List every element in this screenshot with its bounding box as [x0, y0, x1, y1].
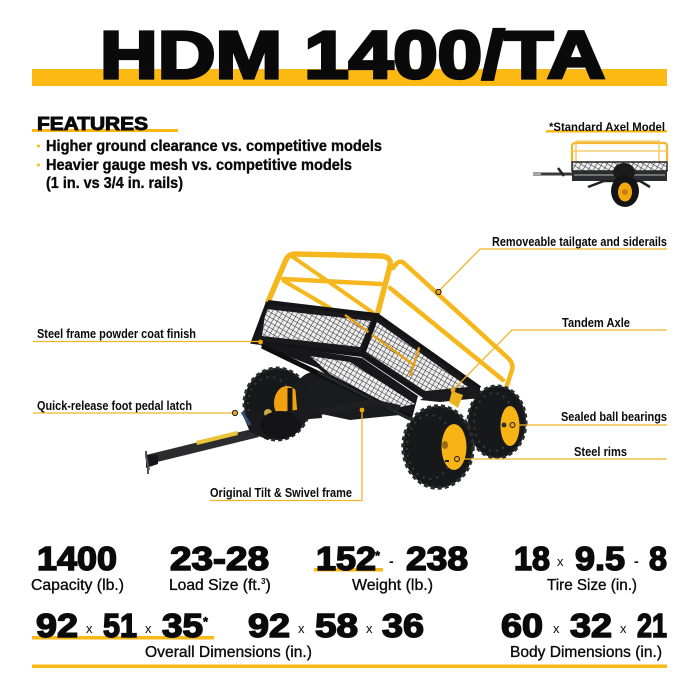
- bottom rule: [32, 664, 667, 668]
- callout: removeable tailgate and siderails: [436, 235, 667, 295]
- callout: steel rims: [454, 445, 667, 462]
- stat: body dimensions: Body Dimensions (in.): [510, 644, 662, 661]
- stat: weight: 238: [406, 540, 468, 577]
- frame and undercarriage: [255, 342, 418, 420]
- features list: [37, 138, 382, 192]
- title: [32, 18, 667, 93]
- stat: tire size: [514, 540, 667, 594]
- callout: sealed ball bearings: Sealed ball bearings: [561, 410, 667, 424]
- cart photo: tandem axle tilt trailer: [146, 254, 526, 488]
- stat: tire size: 18: [514, 540, 550, 577]
- front tandem wheel: [403, 388, 480, 488]
- stat: tire size: -: [634, 553, 639, 569]
- stat: overall dimensions tandem axle: x: [366, 621, 373, 636]
- stat: overall dimensions tandem axle: [248, 607, 424, 644]
- stat: overall dimensions standard axle: x: [145, 621, 152, 636]
- stat: overall dimensions standard axle: 35: [162, 607, 203, 644]
- features list: Higher ground clearance vs. competitive models: [46, 138, 382, 155]
- callout: removeable tailgate and siderails: Removeable tailgate and siderails: [492, 235, 667, 249]
- callout: tandem axle: Tandem Axle: [562, 316, 630, 330]
- callout: sealed ball bearings: [510, 410, 667, 428]
- callout: tandem axle: [451, 316, 667, 392]
- stat: body dimensions: x: [553, 621, 560, 636]
- stat: weight: -: [389, 553, 394, 569]
- tongue and hitch: [146, 408, 314, 474]
- stat: overall dimensions standard axle: x: [86, 621, 93, 636]
- overall dimensions label: Overall Dimensions (in.): [145, 644, 312, 661]
- mesh bed: [253, 302, 480, 397]
- stat: overall dimensions standard axle: 92: [36, 607, 78, 644]
- stat: overall dimensions standard axle: 51: [103, 607, 137, 644]
- stat: overall dimensions standard axle: *: [203, 614, 209, 629]
- rear tandem wheel: [468, 386, 526, 458]
- stat: weight: [314, 540, 468, 594]
- stat: tire size: 9.5: [575, 540, 625, 577]
- stat: body dimensions: x: [620, 621, 627, 636]
- features heading: [32, 114, 178, 134]
- stat: capacity: 1400: [37, 540, 117, 577]
- standard axel model label: *Standard Axel Model: [549, 120, 665, 134]
- stat: weight: 152: [316, 540, 376, 577]
- stat: weight: Weight (lb.): [352, 577, 433, 594]
- stat: load size: ): [266, 577, 271, 594]
- stat: overall dimensions tandem axle: 92: [248, 607, 290, 644]
- stat: overall dimensions tandem axle: 36: [382, 607, 424, 644]
- stat: tire size: 8: [649, 540, 667, 577]
- features list: Heavier gauge mesh vs. competitive models: [46, 157, 352, 174]
- stat: body dimensions: 32: [570, 607, 612, 644]
- stat: load size: 3: [261, 577, 266, 586]
- stat: load size: Load Size (ft.: [169, 577, 261, 594]
- yellow side rails: [268, 254, 512, 385]
- features heading: FEATURES: [37, 114, 148, 134]
- callout: quick-release foot pedal latch: Quick-release foot pedal latch: [37, 399, 192, 413]
- stat: load size: [169, 540, 271, 594]
- stat: body dimensions: 60: [501, 607, 543, 644]
- callout: original tilt and swivel frame: [210, 408, 364, 500]
- stat: capacity: [31, 540, 124, 594]
- callout: original tilt and swivel frame: Original Tilt & Swivel frame: [210, 486, 352, 500]
- stat: body dimensions: 21: [637, 607, 667, 644]
- stat: overall dimensions standard axle: [32, 607, 214, 644]
- stat: weight: *: [375, 548, 381, 563]
- callout: steel frame powder coat finish: [33, 327, 263, 344]
- standard axle cart photo: [533, 141, 667, 207]
- features list: (1 in. vs 3/4 in. rails): [46, 175, 183, 192]
- stat: capacity: Capacity (lb.): [31, 577, 124, 594]
- left wheel: [244, 368, 322, 440]
- stat: tire size: Tire Size (in.): [547, 577, 637, 594]
- title: HDM 1400/TA: [100, 18, 605, 93]
- stat: overall dimensions tandem axle: 58: [315, 607, 358, 644]
- stat: load size: 23-28: [170, 540, 269, 577]
- callout: steel frame powder coat finish: Steel frame powder coat finish: [37, 327, 196, 341]
- stat: tire size: x: [557, 554, 564, 569]
- callout: steel rims: Steel rims: [574, 445, 627, 459]
- stat: body dimensions: [501, 607, 667, 661]
- stat: overall dimensions tandem axle: x: [298, 621, 305, 636]
